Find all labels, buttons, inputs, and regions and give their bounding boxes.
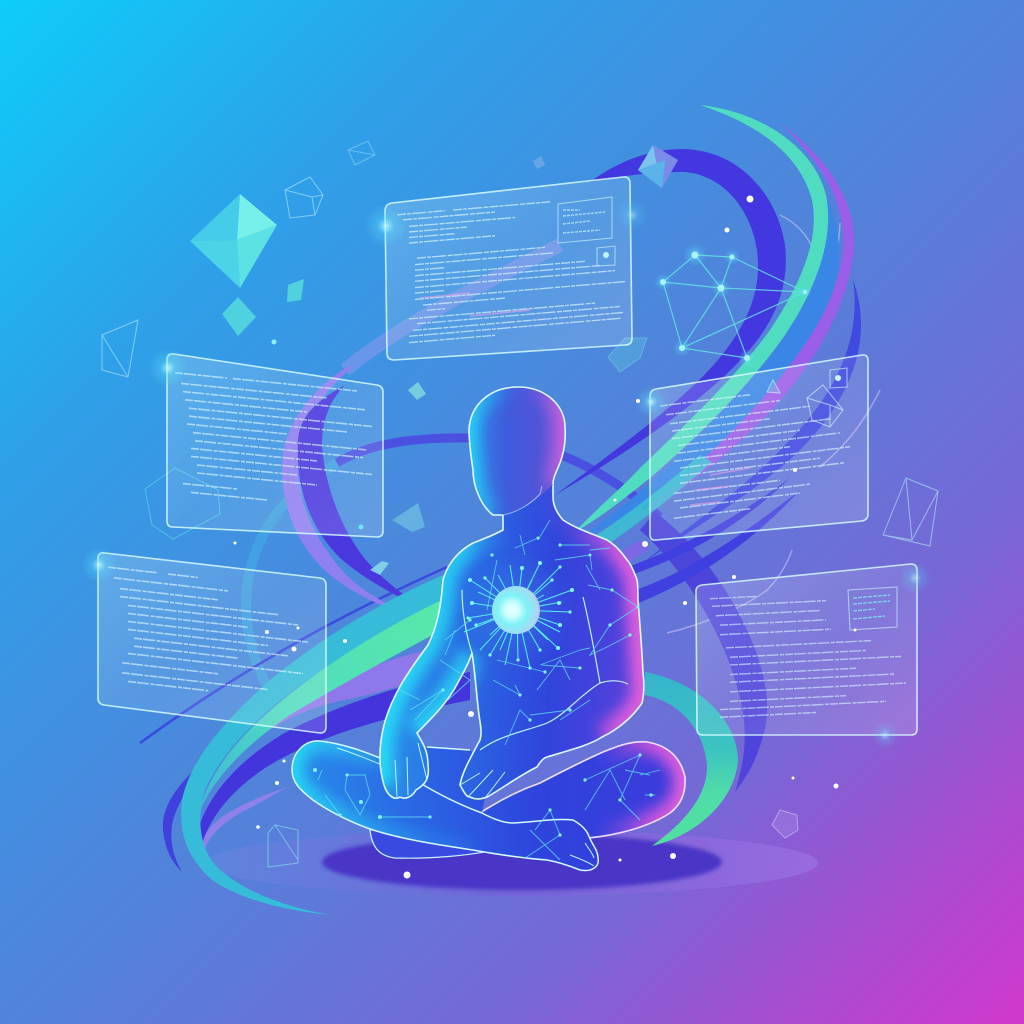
top right crystal — [638, 145, 678, 188]
meditating figure — [292, 387, 685, 870]
lower right teal echo — [565, 455, 712, 560]
left indigo ring — [298, 385, 425, 610]
lower green ribbon — [198, 600, 442, 815]
fingers — [380, 743, 505, 798]
top indigo arc — [555, 149, 786, 495]
inset wire box — [767, 368, 847, 427]
inset box — [558, 197, 615, 266]
lower foot — [370, 826, 505, 858]
panel text lines — [397, 195, 625, 344]
panel corner glows — [81, 199, 931, 749]
flowing ribbons behind the figure — [140, 215, 880, 743]
wireframe shapes — [102, 141, 938, 867]
faint teal ring — [246, 463, 337, 700]
left lavender ring — [282, 365, 415, 618]
inset dot — [835, 375, 841, 381]
large teal crystal — [190, 194, 277, 288]
panel text lines — [175, 373, 372, 510]
left leg — [292, 741, 598, 870]
right pale arcs — [667, 215, 880, 633]
panel: lower left document — [98, 553, 326, 733]
inner body contours — [462, 590, 628, 750]
lower thin indigo arc — [163, 738, 232, 872]
lower thin lavender arc — [202, 786, 290, 855]
pale band crossing top panel — [345, 245, 560, 370]
panel: top document — [385, 177, 632, 360]
lower lavender ribbon — [200, 645, 450, 800]
right indigo thin band — [640, 280, 861, 565]
head — [469, 387, 565, 515]
mid right indigo bands — [630, 478, 800, 604]
inset box — [848, 587, 897, 630]
panel: left document — [167, 354, 383, 537]
big ring right side indigo — [640, 512, 767, 792]
thin blue ring — [337, 438, 660, 517]
panel: right document — [650, 355, 868, 540]
node network — [654, 243, 812, 367]
right purple ribbon — [600, 123, 854, 545]
right blue band — [572, 130, 839, 545]
panel text lines — [108, 567, 308, 702]
panel text lines — [710, 589, 906, 718]
constellation lines — [313, 520, 660, 860]
heart neural burst — [459, 552, 575, 670]
tapered ribbons — [163, 105, 861, 915]
ground shadow — [206, 830, 818, 896]
mid purple band near shoulder — [560, 540, 650, 600]
lower indigo sweep — [198, 672, 470, 852]
small crystals — [222, 156, 545, 575]
panel text lines — [660, 382, 850, 520]
pale polyhedra — [608, 338, 798, 838]
lower teal ribbon — [181, 575, 443, 915]
torso and arms — [380, 480, 644, 799]
pink highlight lines — [420, 293, 530, 316]
panel: lower right document — [696, 564, 917, 735]
right leg — [480, 742, 685, 840]
pink highlight lines — [690, 468, 750, 505]
inset dot — [358, 524, 364, 530]
lower thin diagonal — [140, 567, 447, 743]
right green crescent — [645, 672, 738, 846]
sparkle dots — [234, 196, 856, 878]
lower purple band above teal — [325, 580, 440, 640]
right green ribbon — [575, 105, 828, 532]
polyhedra and wireframes — [102, 141, 938, 867]
inset dot — [603, 252, 609, 258]
